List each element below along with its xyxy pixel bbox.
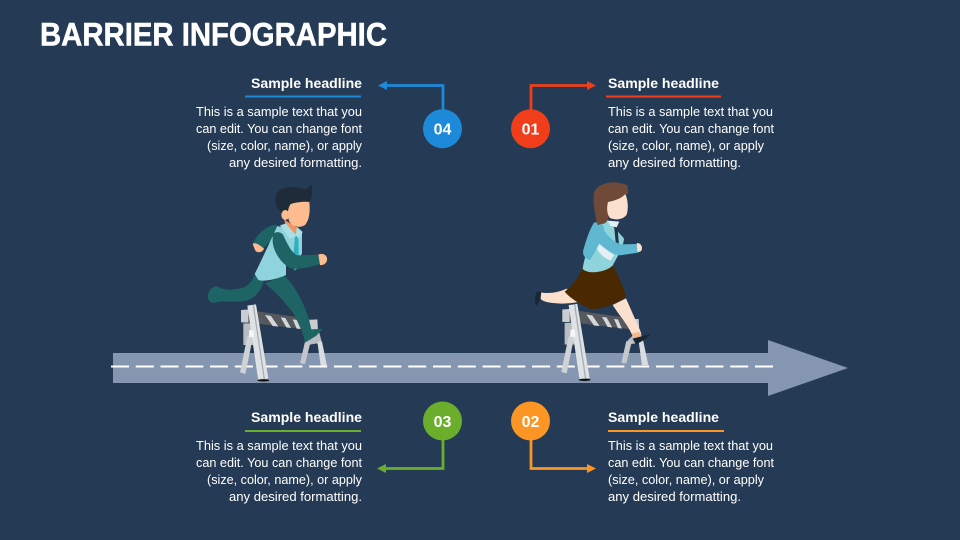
badge 01: 01 xyxy=(522,122,540,138)
arrow 02 xyxy=(531,440,596,473)
body text 04: can edit. You can change font xyxy=(196,122,363,136)
body text 04 xyxy=(196,105,363,170)
badge 03 xyxy=(423,402,462,440)
badge 03: 03 xyxy=(434,414,452,431)
body text 01 xyxy=(608,105,775,170)
body text 02: can edit. You can change font xyxy=(608,456,775,470)
body text 03 xyxy=(196,439,363,504)
body text 03: This is a sample text that you xyxy=(196,439,362,453)
character: running man xyxy=(208,184,327,343)
barrier: right xyxy=(561,304,648,381)
body text 04: This is a sample text that you xyxy=(196,105,362,119)
badge 01 xyxy=(511,109,550,148)
badge 02 xyxy=(511,402,550,440)
body text 02: This is a sample text that you xyxy=(608,439,773,453)
barrier: left xyxy=(240,304,327,381)
body text 02 xyxy=(608,439,775,504)
headline 03: Sample headline xyxy=(251,410,363,425)
panel 04 xyxy=(196,76,462,170)
panel 01 xyxy=(511,76,775,170)
body text 01: any desired formatting. xyxy=(608,156,741,170)
headline 01: Sample headline xyxy=(608,76,720,91)
arrow 04 xyxy=(378,81,443,110)
body text 03: any desired formatting. xyxy=(229,490,362,504)
body text 01: can edit. You can change font xyxy=(608,122,775,136)
headline 02: Sample headline xyxy=(608,410,720,425)
title: BARRIER INFOGRAPHIC xyxy=(40,16,387,52)
arrow 01 xyxy=(531,81,596,110)
body text 03: can edit. You can change font xyxy=(196,456,363,470)
headline 04: Sample headline xyxy=(251,76,363,91)
character: running woman xyxy=(535,182,651,344)
body text 01: (size, color, name), or apply xyxy=(608,139,765,153)
road arrow xyxy=(111,340,848,396)
arrow 03 xyxy=(377,440,443,473)
body text 02: any desired formatting. xyxy=(608,490,741,504)
body text 01: This is a sample text that you xyxy=(608,105,773,119)
panel 03 xyxy=(196,402,462,504)
badge 02: 02 xyxy=(522,414,540,431)
badge 04 xyxy=(423,109,462,148)
panel 02 xyxy=(511,402,775,504)
body text 04: (size, color, name), or apply xyxy=(207,139,363,153)
badge 04: 04 xyxy=(434,122,452,138)
body text 02: (size, color, name), or apply xyxy=(608,473,765,487)
body text 04: any desired formatting. xyxy=(229,156,362,170)
body text 03: (size, color, name), or apply xyxy=(207,473,363,487)
